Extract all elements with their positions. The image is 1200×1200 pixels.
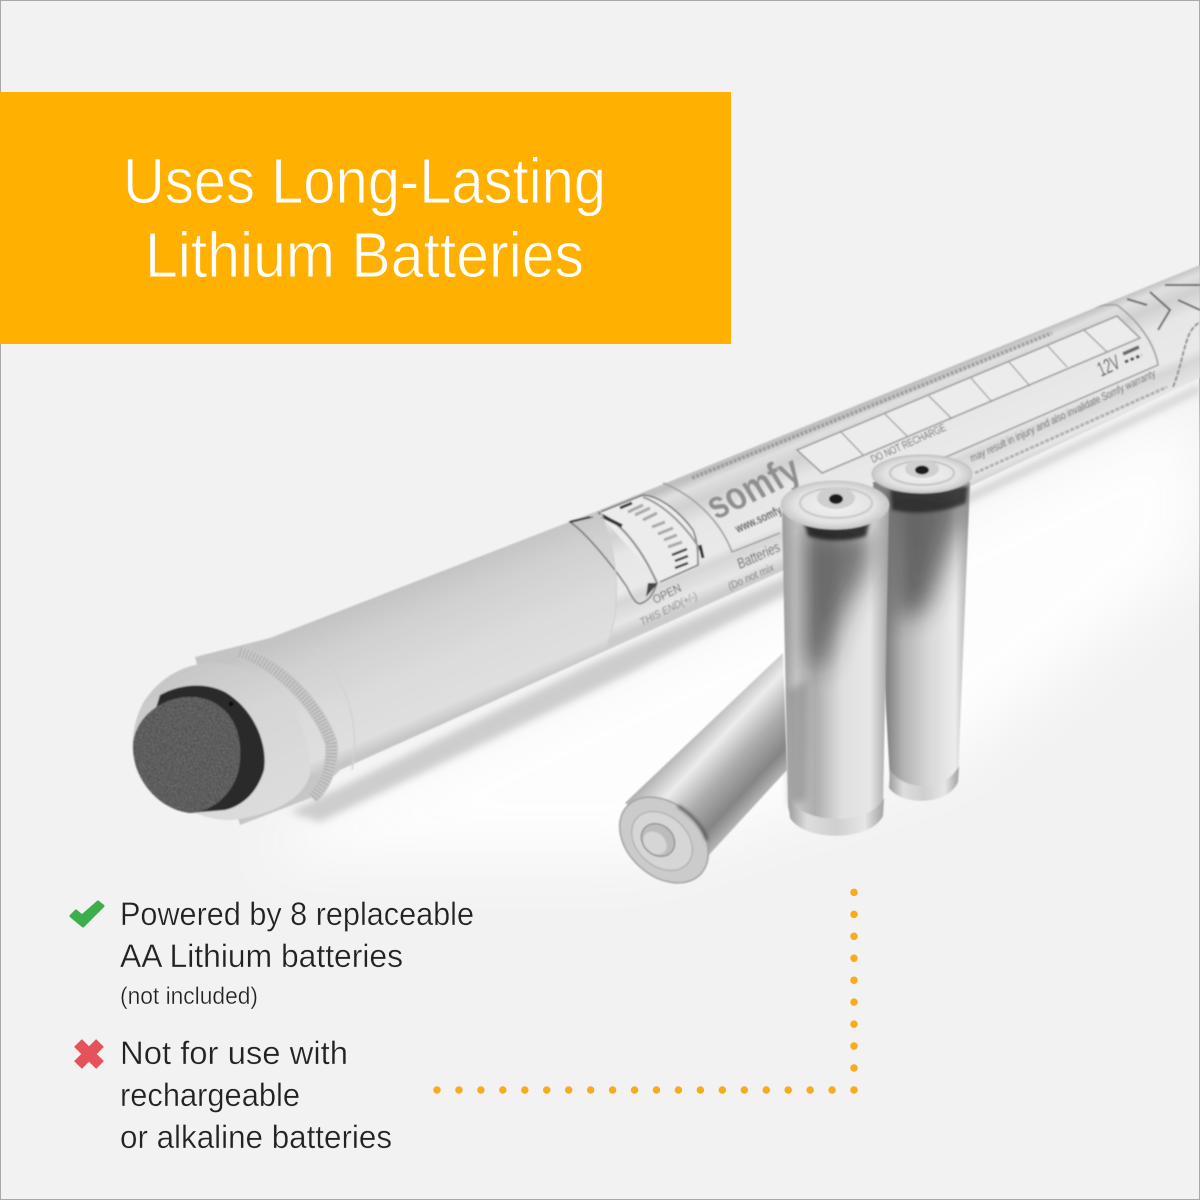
open this end note: OPEN xyxy=(651,581,683,607)
feature text: not for use xyxy=(120,1035,392,1155)
knurled ring xyxy=(240,652,332,798)
feature text: powered by: Powered by 8 replaceable xyxy=(120,896,474,932)
top terminal xyxy=(905,460,939,478)
end collar xyxy=(133,647,354,820)
tube label sleeve xyxy=(600,265,1200,651)
tube body xyxy=(195,510,616,825)
title text xyxy=(123,145,606,291)
dark reflection xyxy=(807,530,872,670)
top cap xyxy=(872,455,972,493)
negative end face xyxy=(603,780,725,900)
voltage mark: 12V xyxy=(1094,351,1124,382)
title banner xyxy=(0,92,731,344)
tube label artwork xyxy=(570,285,1200,629)
brand logo: somfy xyxy=(698,448,809,528)
label outline xyxy=(663,305,1158,552)
right band outline xyxy=(1173,322,1200,387)
top cap xyxy=(781,481,889,529)
title text: Lithium Batteries xyxy=(145,219,584,291)
rubber button rim xyxy=(140,686,265,813)
illustration: lying battery xyxy=(603,653,787,900)
open end diagram xyxy=(570,495,703,604)
illustration: motor tube xyxy=(133,265,1200,825)
terminal ring xyxy=(620,800,704,882)
lower shade xyxy=(788,680,808,805)
end face edge xyxy=(678,806,707,840)
feature text: not for use: or alkaline batteries xyxy=(120,1119,392,1155)
batteries note: Batteries xyxy=(735,540,784,573)
illustration: front standing battery xyxy=(781,481,889,836)
feature text: powered by: AA Lithium batteries xyxy=(120,938,403,974)
base rim xyxy=(889,766,959,801)
under-cap shadow xyxy=(890,486,968,513)
positive nub xyxy=(635,817,681,863)
terminal hole xyxy=(915,466,929,474)
nub top xyxy=(639,827,671,859)
website: www.somfy xyxy=(731,502,785,536)
do not recharge note: DO NOT RECHARGE xyxy=(869,422,948,466)
terminal hole xyxy=(829,494,843,504)
base rim xyxy=(788,798,884,836)
surface reflection xyxy=(260,385,1200,860)
voltage symbol xyxy=(1123,347,1139,354)
icon: red cross xyxy=(78,1043,100,1065)
shoulder line xyxy=(313,647,354,770)
button vent xyxy=(228,702,234,706)
under-cap shadow xyxy=(804,520,870,540)
collar cap xyxy=(133,663,310,820)
voltage dashes xyxy=(1125,355,1142,362)
feature text: powered by: (not included) xyxy=(120,983,258,1010)
feature text: powered by xyxy=(120,896,474,1010)
seam line xyxy=(600,510,616,651)
title text: Uses Long-Lasting xyxy=(123,145,606,217)
cap ring xyxy=(890,461,954,485)
rubber button face xyxy=(133,697,240,813)
cap ring xyxy=(800,488,872,518)
battery cell outlines xyxy=(797,316,1140,473)
do not mix note: (Do not mix xyxy=(726,562,777,593)
this end note: THIS END(+/-) xyxy=(638,590,699,629)
micro print strip xyxy=(692,333,1052,478)
feature text: not for use: rechargeable xyxy=(120,1077,300,1113)
feature text: not for use: Not for use with xyxy=(120,1035,348,1071)
illustration: back standing battery xyxy=(872,455,972,801)
dark reflection xyxy=(892,488,965,620)
top terminal xyxy=(817,487,855,509)
right end icon xyxy=(1127,285,1200,330)
icon: green check xyxy=(71,902,103,926)
fine print line xyxy=(975,387,1167,473)
dotted connector xyxy=(437,889,854,1090)
